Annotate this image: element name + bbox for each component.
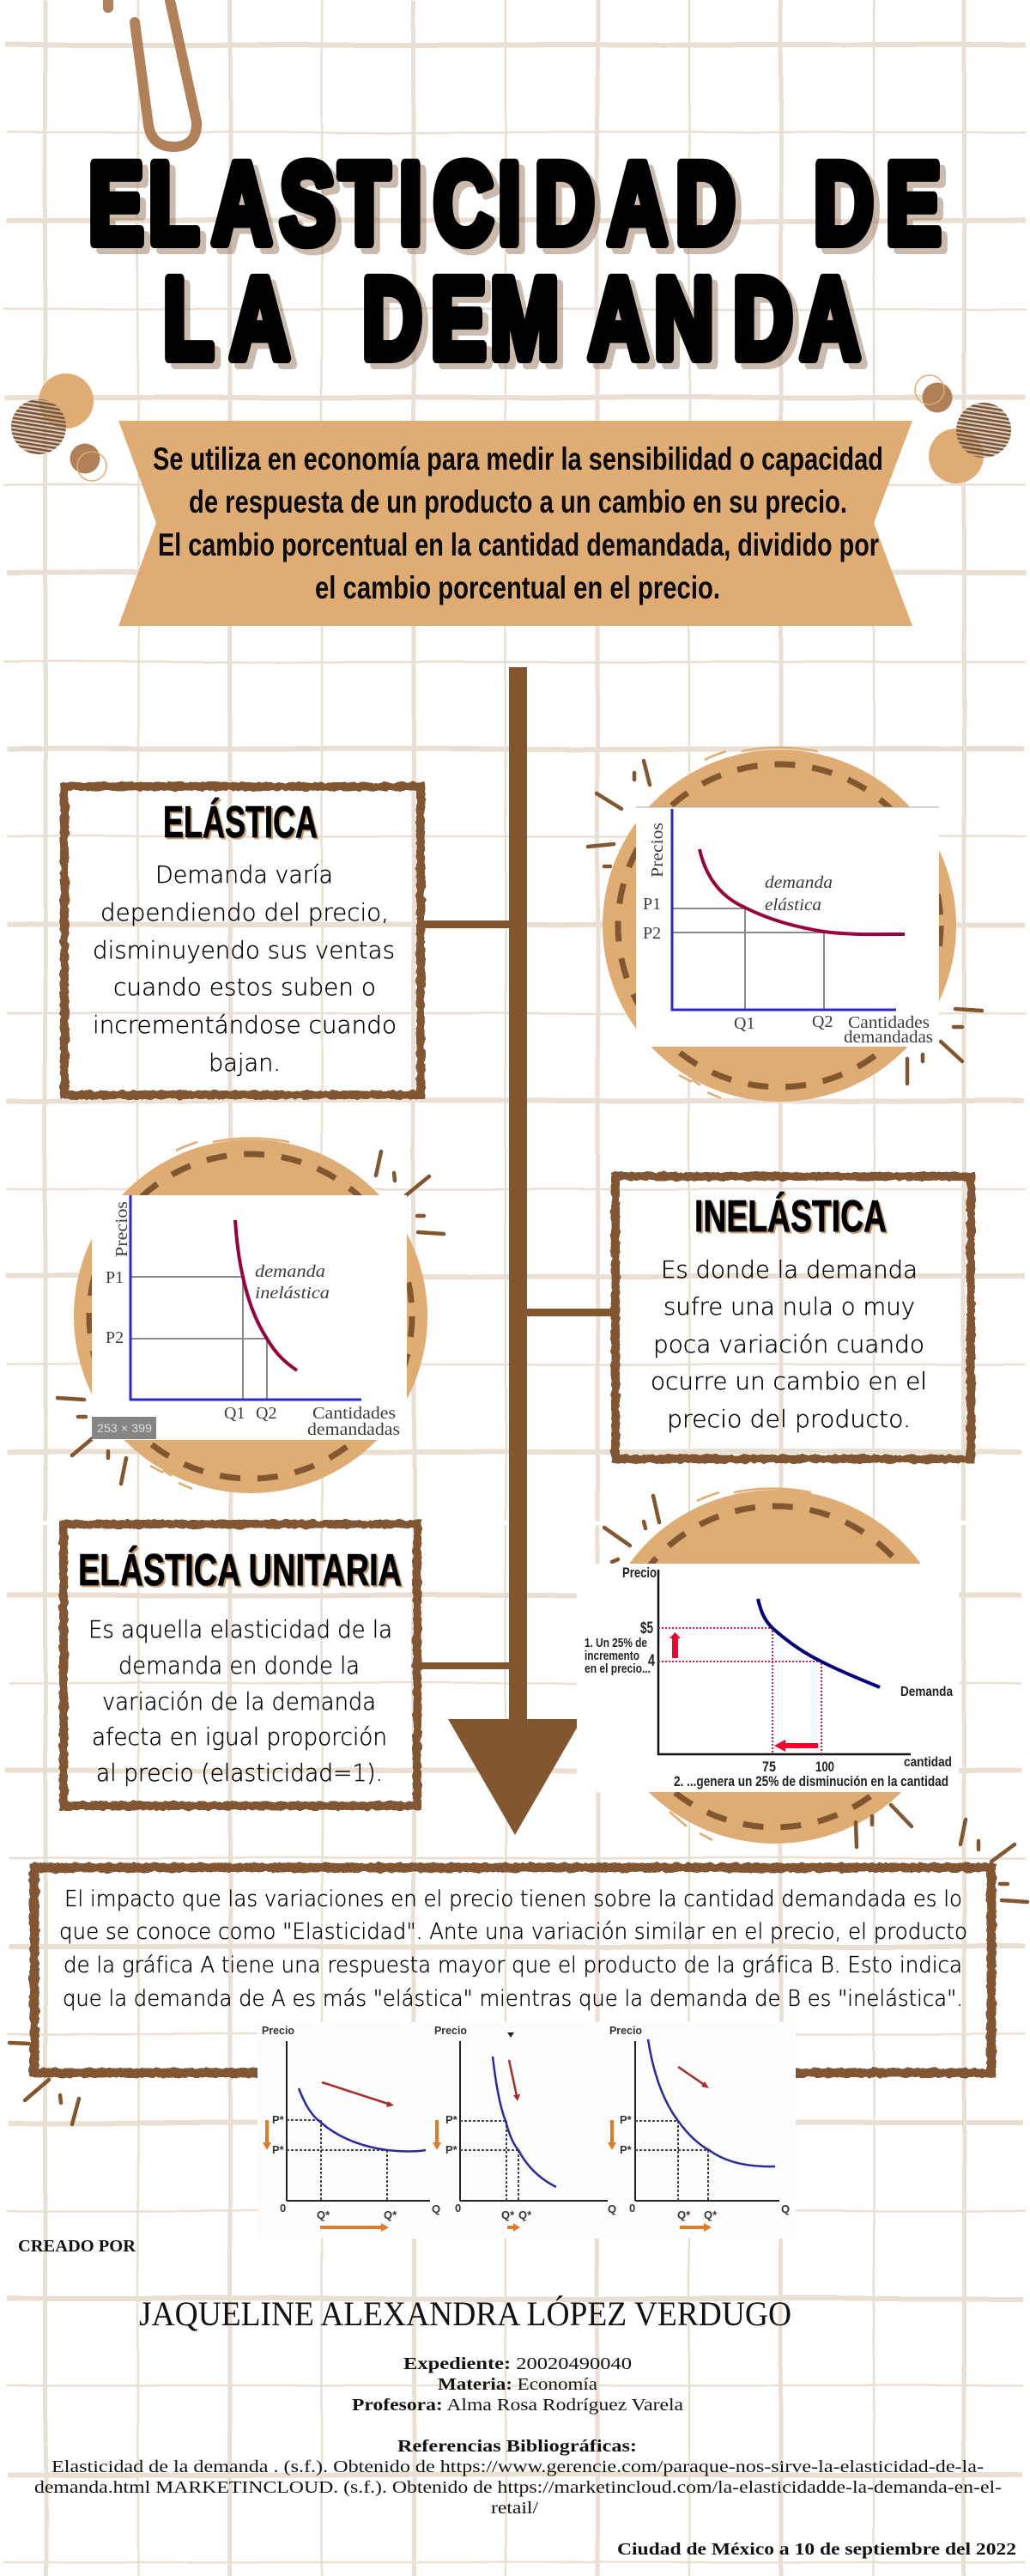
text: definición inelástica: sufre una nula o muy — [663, 1292, 915, 1321]
graph A: Q* — [384, 2208, 397, 2221]
chart: variación de precio y cantidad: cantidad — [904, 1755, 952, 1770]
text: definición unitaria: afecta en igual proporción — [92, 1722, 387, 1751]
text: explicación: El impacto que las variaciones en el precio tienen sobre la cantidad demandada es lo — [64, 1886, 962, 1912]
decoration: right circles — [915, 375, 1011, 483]
text: definición unitaria — [88, 1615, 392, 1787]
graph C: Precio — [609, 2024, 642, 2037]
label: creado por: CREADO POR — [18, 2237, 136, 2256]
graph B: Q — [608, 2202, 616, 2215]
banner: definition — [118, 421, 912, 626]
graph C — [608, 2024, 790, 2232]
circle illustration 3 — [596, 1489, 954, 1847]
author name: JAQUELINE ALEXANDRA LÓPEZ VERDUGO — [139, 2294, 791, 2333]
graph B: P* — [445, 2113, 458, 2126]
text: referencias: Elasticidad de la demanda . (s.f.). Obtenido de https://www.gerencie.com/paraque-nos-sirve-la-elasticidad-de-la- — [52, 2458, 984, 2476]
chart: demanda inelástica: demanda — [255, 1262, 325, 1281]
chart: demanda inelástica: demandadas — [307, 1420, 400, 1439]
text: definición elástica: cuando estos suben o — [113, 973, 376, 1001]
chart: demanda inelástica: P2 — [106, 1328, 124, 1347]
chart: variación de precio y cantidad: 75 — [762, 1759, 776, 1775]
chart: demanda elástica: elástica — [765, 896, 821, 914]
graph A: 0 — [280, 2202, 286, 2215]
text: definición elástica: incrementándose cuando — [93, 1011, 397, 1039]
image size tag: 253 × 399 — [97, 1421, 152, 1435]
graph B: Precio — [434, 2024, 467, 2037]
connector lines — [417, 920, 614, 1669]
text: definición unitaria: Es aquella elasticidad de la — [88, 1615, 392, 1643]
panel: elástica unitaria — [64, 1524, 417, 1806]
graph A: Precio — [262, 2024, 294, 2037]
banner: definition: el cambio porcentual en el precio. — [315, 570, 720, 605]
graph A: Q* — [317, 2208, 330, 2221]
graph B: Q* — [501, 2208, 515, 2221]
graph B — [433, 2024, 616, 2232]
graph A: Q — [432, 2202, 440, 2215]
chart: variación de precio y cantidad: 100 — [815, 1759, 834, 1775]
panel: inelástica — [615, 1176, 971, 1459]
text: definición inelástica: poca variación cuando — [653, 1330, 924, 1358]
text: explicación: de la gráfica A tiene una respuesta mayor que el producto de la gráfica B. Esto indica — [64, 1953, 962, 1978]
panel: explicación — [9, 1820, 1027, 2124]
text: definición inelástica — [651, 1255, 927, 1433]
text: definición elástica: disminuyendo sus ventas — [93, 936, 395, 964]
graph B: P* — [445, 2143, 458, 2156]
text: datos del alumno — [352, 2354, 683, 2415]
chart: demanda inelástica: Cantidades — [312, 1404, 396, 1423]
text: datos del alumno: Expediente: 20020490040 — [403, 2354, 632, 2373]
chart: demanda inelástica — [92, 1195, 407, 1440]
text: definición unitaria: demanda en donde la — [118, 1651, 360, 1680]
graph A: P* — [272, 2113, 285, 2126]
text: datos del alumno: Profesora: Alma Rosa Rodríguez Varela — [352, 2396, 683, 2415]
banner: definition: de respuesta de un producto a un cambio en su precio. — [189, 484, 847, 519]
chart: demanda elástica: P1 — [643, 895, 661, 914]
title — [88, 138, 941, 383]
graph A: P* — [272, 2143, 285, 2156]
central vertical arrow — [448, 667, 582, 1835]
text: definición unitaria: al precio (elasticidad=1). — [96, 1759, 383, 1787]
image size tag — [92, 1417, 156, 1439]
chart: variación de precio y cantidad: 4 — [648, 1652, 655, 1670]
graph C: 0 — [629, 2202, 635, 2215]
chart: demanda inelástica: Q1 — [224, 1404, 245, 1423]
title: LA DEMANDA — [163, 253, 860, 383]
circle illustration 1 — [588, 747, 982, 1102]
heading: elástica unitaria: ELÁSTICA UNITARIA — [78, 1546, 402, 1595]
graph A — [262, 2024, 440, 2232]
chart: variación de precio y cantidad: incremento — [585, 1649, 639, 1663]
chart: variación de precio y cantidad: Demanda — [900, 1685, 953, 1699]
chart: demanda inelástica: P1 — [106, 1268, 124, 1287]
chart: demanda elástica: Q2 — [812, 1012, 833, 1031]
chart: demanda elástica: Precios — [648, 823, 667, 878]
panel: elástica — [64, 787, 421, 1095]
chart: variación de precio y cantidad: 1. Un 25% de — [585, 1636, 647, 1650]
graph C: Q — [781, 2202, 790, 2215]
graph C: Q* — [704, 2208, 718, 2221]
decoration: left circles — [11, 374, 106, 481]
graph B: Q* — [518, 2208, 532, 2221]
text: referencias: retail/ — [491, 2499, 539, 2518]
text: datos del alumno: Materia: Economía — [438, 2375, 597, 2394]
chart: variación de precio y cantidad: $5 — [640, 1619, 653, 1637]
chart: demanda elástica: P2 — [643, 924, 661, 943]
chart: demanda elástica — [636, 807, 939, 1047]
chart: variación de precio y cantidad: Precio — [622, 1564, 657, 1581]
graph C: P* — [620, 2113, 633, 2126]
heading: elástica: ELÁSTICA — [163, 798, 318, 848]
text: lugar y fecha: Ciudad de México a 10 de septiembre del 2022 — [617, 2540, 1016, 2559]
chart: demanda elástica: demanda — [765, 873, 833, 892]
chart: demanda inelástica: inelástica — [255, 1284, 330, 1303]
decorative marks around panel — [9, 1820, 1027, 2124]
text: referencias: demanda.html MARKETINCLOUD. (s.f.). Obtenido de https://marketincloud.com/la-elasticidadde-la-demanda-en-el- — [34, 2478, 1002, 2497]
text: explicación: que se conoce como "Elasticidad". Ante una variación similar en el precio, el producto — [59, 1919, 967, 1945]
text: definición elástica — [93, 860, 397, 1077]
text: definición unitaria: variación de la demanda — [102, 1687, 376, 1716]
text: definición inelástica: Es donde la demanda — [661, 1255, 918, 1284]
chart: demanda elástica: Cantidades — [848, 1013, 930, 1032]
text: definición elástica: Demanda varía — [155, 860, 333, 889]
chart: demanda elástica: Q1 — [734, 1014, 754, 1033]
text: explicación: que la demanda de A es más "elástica" mientras que la demanda de B es "inelástica". — [63, 1986, 963, 2012]
footer credits — [18, 2237, 1016, 2559]
chart: variación de precio y cantidad: 2. ...genera un 25% de disminución en la cantidad — [674, 1773, 948, 1789]
text: referencias: Referencias Bibliográficas: — [397, 2437, 637, 2456]
graph C: P* — [620, 2143, 633, 2156]
text: definición elástica: dependiendo del precio, — [100, 898, 389, 927]
chart: tres gráficas comparativas — [258, 2022, 796, 2239]
chart: demanda inelástica: Precios — [112, 1201, 131, 1257]
text: definición inelástica: precio del producto. — [667, 1405, 911, 1433]
icon: paperclip — [108, 0, 197, 147]
text: referencias — [34, 2437, 1002, 2518]
chart: demanda elástica: demandadas — [844, 1028, 933, 1047]
chart: demanda inelástica: Q2 — [256, 1404, 276, 1423]
circle illustration 2 — [58, 1139, 444, 1493]
chart: variación de precio y cantidad: en el precio... — [585, 1662, 651, 1676]
graph B: 0 — [455, 2202, 461, 2215]
text: definición inelástica: ocurre un cambio en el — [651, 1367, 927, 1395]
graph C: Q* — [677, 2208, 691, 2221]
text: definición elástica: bajan. — [209, 1048, 281, 1077]
title: ELASTICIDAD DE — [88, 138, 941, 268]
heading: inelástica: INELÁSTICA — [694, 1192, 887, 1242]
chart: variación de precio y cantidad — [577, 1564, 959, 1792]
text: explicación — [59, 1886, 967, 2012]
